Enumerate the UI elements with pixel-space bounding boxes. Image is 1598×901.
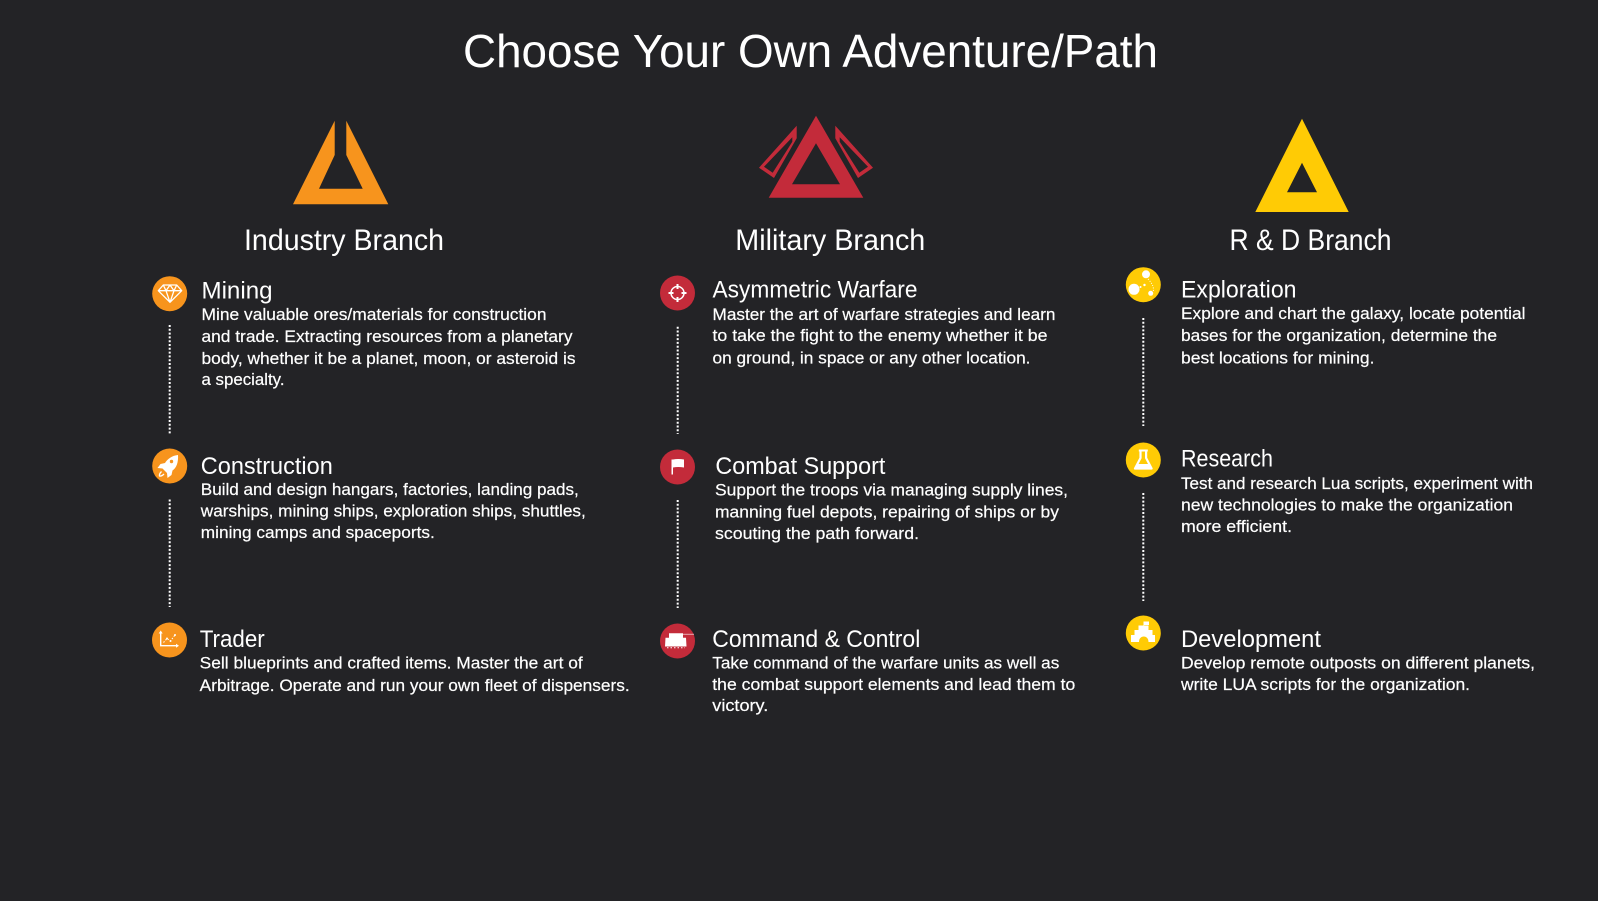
panel: military branch [660,116,1075,715]
item description: Sell blueprints and crafted items. Master the art of [200,654,583,672]
item description: Mine valuable ores/materials for construction [202,305,546,324]
item description [712,654,1075,715]
item description [1181,304,1526,367]
item title: Exploration [1181,277,1296,304]
icon: crosshair [660,276,695,310]
item description: best locations for mining. [1181,348,1374,367]
item description: Arbitrage. Operate and run your own fleet of dispensers. [200,676,630,695]
item description [1181,474,1533,536]
item description: Develop remote outposts on different planets, [1181,654,1535,672]
item title: Research [1181,446,1273,473]
item description [200,480,586,542]
icon: military emblem [759,116,873,198]
item description: manning fuel depots, repairing of ships or by [715,503,1060,522]
item title: Command & Control [712,626,920,653]
icon: diamond [152,276,187,311]
item description: the combat support elements and lead them to [712,675,1075,694]
item title: Mining [202,278,272,305]
panel: industry branch [152,121,630,695]
item description: mining camps and spaceports. [201,523,435,542]
icon: industry emblem [293,121,388,204]
item description [712,305,1056,367]
item description: on ground, in space or any other location. [712,348,1030,367]
item description: write LUA scripts for the organization. [1180,675,1470,694]
icon: flask [1126,442,1161,478]
item description: and trade. Extracting resources from a planetary [202,327,573,346]
item description: new technologies to make the organization [1181,496,1513,515]
item description: scouting the path forward. [715,524,919,543]
item: asymmetric warfare [660,276,1056,434]
item title: Trader [200,626,265,653]
icon: star map [1126,267,1161,302]
item title: Combat Support [715,453,886,480]
item: exploration [1126,267,1526,426]
item description [200,654,630,695]
icon: rocket [152,448,187,484]
item description: more efficient. [1181,517,1292,536]
item description: bases for the organization, determine the [1181,326,1497,345]
title: Choose Your Own Adventure/Path [463,25,1158,77]
item: research [1126,442,1533,601]
panel: r&d branch [1126,119,1535,694]
icon: chart [152,622,187,658]
item description: a specialty. [202,370,284,389]
item: combat support [660,450,1068,608]
item: command and control [660,624,1075,715]
item: construction [152,448,586,607]
item description [715,480,1068,543]
icon: tank [660,624,695,658]
item: trader [152,622,630,695]
item description: body, whether it be a planet, moon, or asteroid is [202,349,576,368]
item description: victory. [712,696,768,715]
icon: outpost [1126,616,1161,650]
item description: Build and design hangars, factories, landing pads, [201,480,579,499]
item title: Development [1181,626,1321,653]
item description: to take the fight to the enemy whether it be [712,326,1048,345]
item description: Explore and chart the galaxy, locate potential [1181,304,1526,323]
item description [1180,654,1535,694]
item description: Support the troops via managing supply lines, [715,480,1068,499]
heading: military branch: Military Branch [735,224,925,257]
item description [202,305,576,389]
item title: Construction [201,453,333,480]
item description: Test and research Lua scripts, experiment with [1181,474,1533,493]
heading: industry branch: Industry Branch [244,224,444,257]
icon: r&d emblem [1255,119,1349,212]
item description: Take command of the warfare units as well as [712,654,1059,672]
item: mining [152,276,575,434]
item description: Master the art of warfare strategies and learn [712,305,1056,324]
icon: flag [660,450,695,484]
item: development [1126,616,1535,694]
item title: Asymmetric Warfare [712,277,918,304]
item description: warships, mining ships, exploration ships, shuttles, [200,502,586,521]
heading: r&d branch: R & D Branch [1230,224,1392,257]
